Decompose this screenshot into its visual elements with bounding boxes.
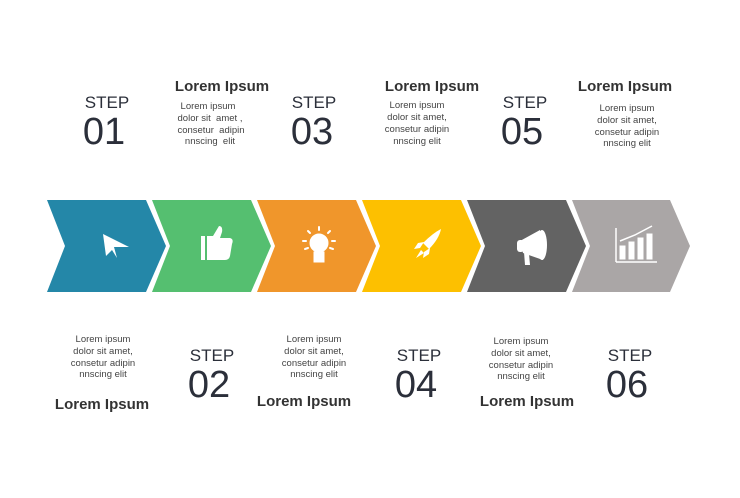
text block 2: Lorem ipsum [76,334,131,345]
text block 2: nnscing elit [79,369,127,380]
text block 4: Lorem Ipsum [257,393,351,410]
arrow 6: light gray [572,200,690,292]
text block 2: dolor sit amet, [73,346,133,357]
step 05 label: STEP [503,93,547,112]
step 02 label [188,346,234,406]
text block 1: Lorem Ipsum [175,78,269,95]
text block 5: nnscing elit [603,138,651,149]
step 06 label [606,346,652,406]
step 03 label: 03 [291,111,333,153]
text block 2 [55,334,149,413]
text block 1 [175,78,269,147]
arrow 4: yellow [362,200,481,292]
arrow 5: dark gray [467,200,586,292]
text block 6 [480,336,574,410]
arrow 2: green [152,200,271,292]
step 05 label [501,93,547,153]
text block 6: nnscing elit [497,371,545,382]
arrow 1: blue [47,200,166,292]
text block 6: Lorem ipsum [494,336,549,347]
text block 1: consetur adipin [177,125,245,136]
step 04 label [395,346,441,406]
text block 3 [385,78,479,147]
icon: thumbs up [201,226,233,260]
icon: light bulb [303,227,335,262]
text block 3: consetur adipin [385,124,449,135]
icon: megaphone [517,230,547,265]
text block 3: dolor sit amet, [387,112,447,123]
text block 1: nnscing elit [185,136,235,147]
text block 5 [578,78,672,149]
text block 5: Lorem ipsum [600,103,655,114]
icon: growth chart [616,226,657,262]
text block 6: Lorem Ipsum [480,393,574,410]
step 06 label: STEP [608,346,652,365]
text block 4: nnscing elit [290,369,338,380]
text block 4 [257,334,351,410]
step 03 label [291,93,336,153]
step 05 label: 05 [501,111,543,153]
step 03 label: STEP [292,93,336,112]
step 02 label: STEP [190,346,234,365]
text block 4: Lorem ipsum [287,334,342,345]
text block 2: Lorem Ipsum [55,396,149,413]
step 04 label: 04 [395,364,437,406]
step 01 label [83,93,129,153]
text block 4: consetur adipin [282,358,346,369]
icon: rocket [414,229,441,258]
text block 5: Lorem Ipsum [578,78,672,95]
text block 2: consetur adipin [71,358,135,369]
text block 5: dolor sit amet, [597,115,657,126]
step 04 label: STEP [397,346,441,365]
text block 1: dolor sit amet , [178,113,242,124]
step 01 label: STEP [85,93,129,112]
text block 6: dolor sit amet, [491,348,551,359]
text block 5: consetur adipin [595,127,659,138]
step 01 label: 01 [83,111,125,153]
text block 3: nnscing elit [393,136,441,147]
icon: paper plane [103,234,129,258]
text block 6: consetur adipin [489,360,553,371]
text block 3: Lorem ipsum [390,100,445,111]
step 02 label: 02 [188,364,230,406]
text block 4: dolor sit amet, [284,346,344,357]
text block 3: Lorem Ipsum [385,78,479,95]
arrow 3: orange [257,200,376,292]
step 06 label: 06 [606,364,648,406]
text block 1: Lorem ipsum [181,101,236,112]
